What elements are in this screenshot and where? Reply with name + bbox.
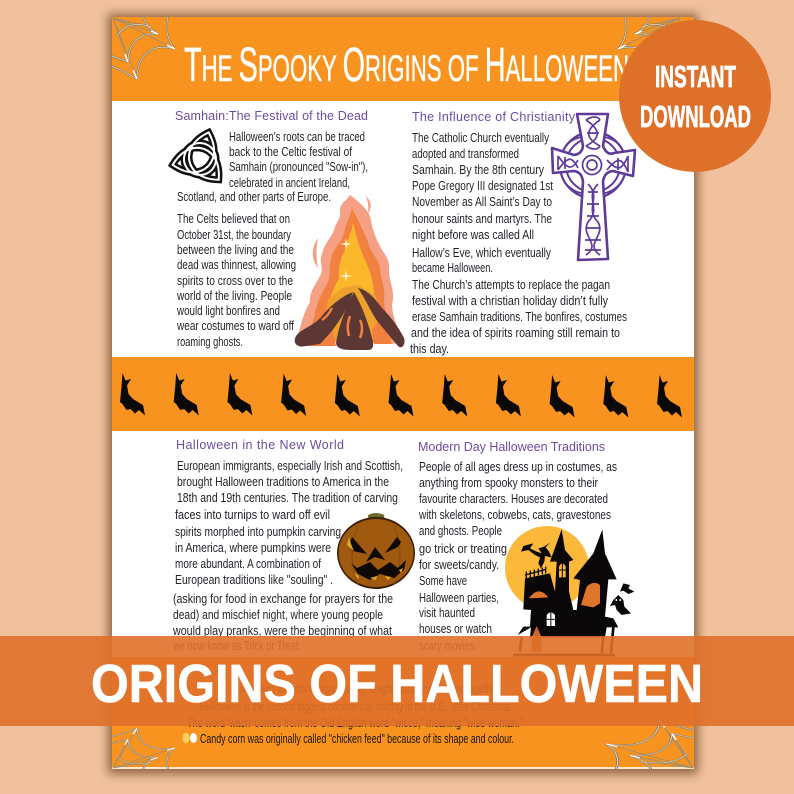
paragraph: immigrants: more abundant. A combination of <box>175 557 321 571</box>
panel: upper white section <box>112 101 694 357</box>
paragraph: Samhain intro: Samhain (pronounced "Sow-in"), <box>229 160 368 174</box>
fact: commercial holiday: Halloween is the second biggest commercial holiday in the U.S., after Christmas. <box>200 700 513 714</box>
icon: cobweb top right <box>617 17 680 50</box>
badge: instant download <box>619 20 771 172</box>
paragraph: modern traditions <box>418 460 617 653</box>
paragraph: Catholic church: honour saints and martyrs. The <box>412 212 552 226</box>
stilts and ground <box>513 627 615 655</box>
paragraph: immigrants: in America, where pumpkins were <box>175 541 331 555</box>
paragraph: Celts belief: The Celts believed that on <box>177 212 290 226</box>
paragraph: Celts belief: wear costumes to ward off <box>176 319 294 333</box>
windows <box>529 591 548 598</box>
paragraph: immigrants: we now know as Trick or Treat. <box>172 639 301 653</box>
paragraph: pagan festival: and the idea of spirits roaming still remain to <box>411 326 620 340</box>
paragraph: immigrants: brought Halloween traditions to America in the <box>177 475 389 489</box>
title: THE SPOOKY ORIGINS OF HALLOWEEN <box>184 39 629 92</box>
moon <box>505 526 589 610</box>
icon: cobweb top left <box>111 16 175 79</box>
icon: jack-o-lantern pumpkin <box>337 513 415 589</box>
paragraph: Catholic church: night before was called All <box>412 228 534 242</box>
paragraph: Celts belief <box>176 212 296 349</box>
fact: family: Halloween traditions bring family, neighbours and friends together. <box>232 682 502 696</box>
paragraph: modern traditions: houses or watch <box>419 622 492 636</box>
paragraph: immigrants: European immigrants, especially Irish and Scottish, <box>177 459 403 473</box>
fact: witch: The word 'witch' comes from the Old English word "wicce," meaning "wise woman." <box>187 716 523 730</box>
paragraph: immigrants: European traditions like "souling" . <box>175 573 333 587</box>
paragraph: immigrants <box>172 459 403 653</box>
icon: bonfire <box>295 195 405 350</box>
icon: candy corn <box>182 732 197 744</box>
icon: haunted house with moon <box>505 526 634 655</box>
paragraph: Catholic church: became Halloween. <box>412 261 493 275</box>
text block: Samhain section <box>175 109 368 349</box>
witch on broom <box>521 543 552 568</box>
paragraph: immigrants: dead) and mischief night, where young people <box>173 608 383 622</box>
paragraph: Catholic church: Samhain. By the 8th century <box>412 163 545 177</box>
paragraph: Celts belief: October 31st, the boundary <box>177 228 292 242</box>
paragraph: Celts belief: would light bonfires and <box>176 304 280 318</box>
paragraph: Samhain intro: celebrated in ancient Ireland, <box>229 176 350 190</box>
paragraph: modern traditions: scary movies. <box>419 639 477 653</box>
paragraph: modern traditions: visit haunted <box>419 606 475 620</box>
page shadow <box>108 14 698 774</box>
paragraph: modern traditions: for sweets/candy. <box>419 558 499 572</box>
banner: origins of halloween: ORIGINS OF HALLOWEEN <box>91 654 703 714</box>
paragraph: Celts belief: spirits to cross over to the <box>177 274 293 288</box>
paragraph: pagan festival: this day. <box>410 342 449 356</box>
cobwebs in the four corners <box>111 16 696 770</box>
paragraph: Samhain intro: Halloween’s roots can be traced <box>229 130 365 144</box>
paragraph: Samhain intro <box>177 130 368 204</box>
paragraph: Catholic church: November as All Saint’s Day to <box>412 195 552 209</box>
paragraph: immigrants: spirits morphed into pumpkin carving <box>175 525 341 539</box>
badge: instant download: INSTANT <box>655 59 736 94</box>
paragraph: Celts belief: world of the living. People <box>176 289 292 303</box>
paragraph: immigrants: faces into turnips to ward off evil <box>175 508 330 522</box>
paragraph: modern traditions: with skeletons, cobwebs, cats, gravestones <box>418 508 611 522</box>
paragraph: Catholic church: Hallow’s Eve, which eventually <box>412 246 552 260</box>
paragraph: pagan festival <box>410 278 627 356</box>
paragraph: pagan festival: erase Samhain traditions. The bonfires, costumes <box>412 310 627 324</box>
paragraph: Catholic church: The Catholic Church eventually <box>412 131 550 145</box>
paragraph: Catholic church: Pope Gregory III designated 1st <box>412 179 553 193</box>
house silhouette <box>518 529 618 637</box>
text block: Modern Day section <box>418 440 617 653</box>
text block: Christianity section <box>410 110 627 356</box>
paragraph: modern traditions: favourite characters. Houses are decorated <box>419 492 608 506</box>
heading: Christianity: The Influence of Christianity <box>412 110 576 124</box>
paragraph: immigrants: (asking for food in exchange for prayers for the <box>173 592 393 606</box>
heading: New World: Halloween in the New World <box>176 438 344 452</box>
paragraph: modern traditions: go trick or treating <box>419 542 507 556</box>
paragraph: immigrants: would play pranks, were the beginning of what <box>172 624 392 638</box>
banner: origins of halloween <box>0 636 794 726</box>
paragraph: modern traditions: and ghosts. People <box>419 524 502 538</box>
paragraph: Celts belief: between the living and the <box>177 243 294 257</box>
paragraph: immigrants: 18th and 19th centuries. The tradition of carving <box>177 491 398 505</box>
heading: Samhain: Samhain:The Festival of the Dead <box>175 109 368 123</box>
text block: New World section <box>172 438 403 653</box>
paragraph: Samhain intro: back to the Celtic festival of <box>229 145 352 159</box>
paragraph: modern traditions: Some have <box>419 574 467 588</box>
ghosts <box>620 583 634 594</box>
paragraph: modern traditions: anything from spooky monsters to their <box>419 476 598 490</box>
paragraph: Catholic church: adopted and transformed <box>412 147 519 161</box>
paragraph: pagan festival: festival with a christian holiday didn’t fully <box>412 294 609 308</box>
icon: cobweb bottom left <box>111 728 175 769</box>
paragraph: Celts belief: roaming ghosts. <box>177 335 243 349</box>
paragraph: Samhain intro: Scotland, and other parts of Europe. <box>177 190 331 204</box>
heading: Modern Day: Modern Day Halloween Traditions <box>418 440 605 454</box>
panel: lower white section <box>112 431 694 657</box>
icon: triquetra knot <box>164 123 237 192</box>
paragraph: Catholic church <box>412 131 553 275</box>
logs <box>295 292 353 347</box>
paragraph: Celts belief: dead was thinnest, allowing <box>177 258 296 272</box>
icon: cobweb bottom right <box>606 720 696 770</box>
page: infographic sheet <box>112 17 694 769</box>
text block: fun facts <box>182 682 523 746</box>
paragraph: pagan festival: The Church’s attempts to replace the pagan <box>412 278 610 292</box>
icon: celtic cross <box>552 114 635 260</box>
paragraph: modern traditions: Halloween parties, <box>419 591 499 605</box>
fact: candy corn: Candy corn was originally called "chicken feed" because of its shape and colour. <box>200 732 514 746</box>
paragraph: modern traditions: People of all ages dress up in costumes, as <box>419 460 617 474</box>
band: bats divider <box>120 373 682 418</box>
